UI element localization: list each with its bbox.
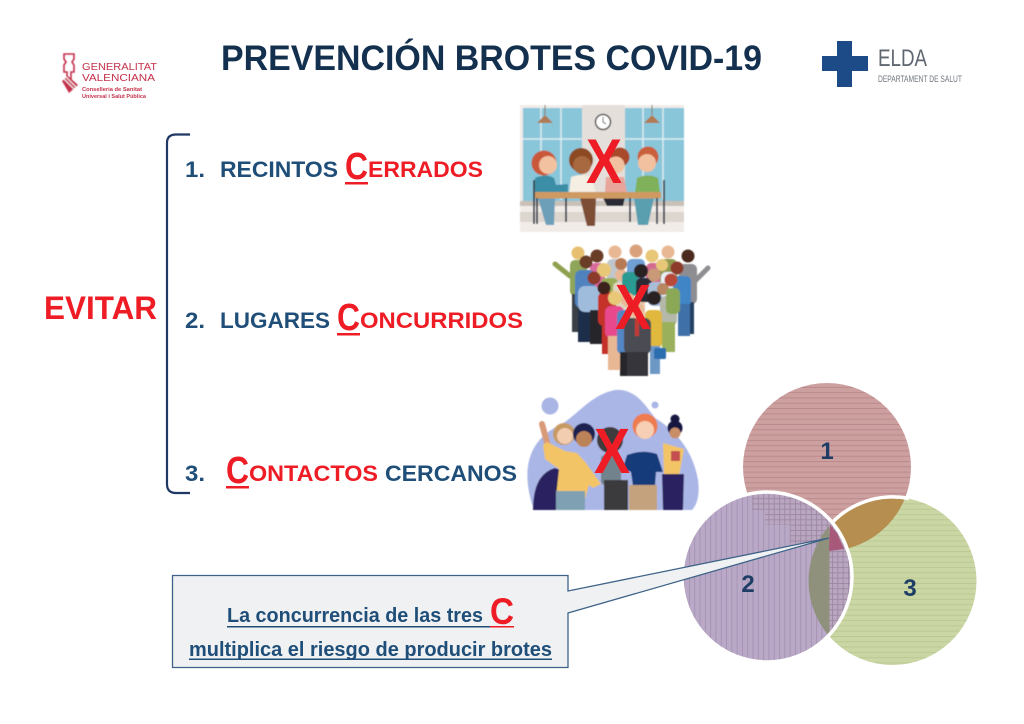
item 2: lugares concurridos: LUGARES (220, 308, 330, 333)
third row (578, 286, 600, 312)
person left (532, 150, 556, 176)
number 1: 1 (820, 438, 834, 465)
callout shape (172, 538, 829, 668)
number 2: 2 (741, 571, 755, 598)
icon: red X 1: X (586, 127, 622, 197)
circle 3 (808, 497, 976, 665)
callout text line 2: multiplica el riesgo de producir brotes (189, 639, 552, 661)
callout text line 1: La concurrencia de las tres (227, 605, 483, 627)
callout (172, 538, 829, 668)
table (535, 192, 661, 198)
bracket (167, 134, 190, 493)
image: close contacts group (527, 390, 699, 510)
big red C: C (490, 591, 514, 632)
person right (638, 146, 658, 168)
item 1: recintos cerrados: ERRADOS (368, 157, 483, 182)
item 2: lugares concurridos (185, 297, 523, 339)
item 2: lugares concurridos: C (337, 297, 360, 339)
item 2: lugares concurridos: ONCURRIDOS (360, 308, 523, 333)
logo: Generalitat Valenciana: VALENCIANA (82, 72, 155, 84)
item 1: recintos cerrados: 1. (185, 157, 205, 182)
red hair person (632, 414, 658, 438)
icon: coat of arms (62, 54, 78, 93)
raised arms (555, 264, 570, 276)
clock (596, 114, 610, 130)
item 3: contactos cercanos: 3. (185, 461, 205, 486)
item 2: lugares concurridos: 2. (185, 308, 205, 333)
item 3: contactos cercanos: CERCANOS (385, 461, 517, 486)
venn diagram (682, 383, 976, 665)
logo: Elda health department (822, 41, 962, 87)
image: crowd of people (555, 244, 708, 376)
icon: blue cross (822, 41, 868, 87)
heading: EVITAR: EVITAR (44, 290, 157, 326)
logo: Elda health department: DEPARTAMENT DE SALUT (878, 74, 962, 85)
white ring 3 (823, 497, 909, 534)
back row (570, 260, 587, 296)
overlap 1 and 2 grid (752, 495, 835, 545)
item 3: contactos cercanos (185, 450, 517, 492)
front row (605, 306, 624, 338)
left woman (533, 468, 565, 510)
logo: Generalitat Valenciana: Conselleria de Sanitat (82, 87, 142, 93)
white ring 2 top (682, 492, 852, 662)
number 3: 3 (903, 575, 917, 602)
second row (575, 270, 595, 308)
person third (610, 148, 630, 166)
overlap 2 and 3 gray (808, 526, 830, 634)
item 1: recintos cerrados (185, 146, 483, 188)
item 3: contactos cercanos: ONTACTOS (249, 461, 378, 486)
right woman (670, 414, 680, 424)
item 3: contactos cercanos: C (226, 450, 249, 492)
middle woman (597, 427, 623, 453)
person second (569, 148, 593, 172)
image: people meeting in closed room (520, 105, 684, 232)
circle 1 (743, 383, 911, 551)
icon: red X 2: X (615, 271, 651, 343)
yellow shirt man (543, 442, 601, 499)
logo: Generalitat Valenciana (62, 54, 158, 100)
logo: Generalitat Valenciana: Universal i Salut Pública (82, 94, 147, 100)
icon: red X 3: X (594, 415, 630, 487)
triple overlap (829, 525, 844, 551)
lamps (537, 115, 553, 123)
overlap 1 and 3 (834, 498, 904, 548)
logo: Elda health department: ELDA (878, 45, 927, 72)
overlap 2 and 3 grid (830, 550, 850, 632)
item 1: recintos cerrados: RECINTOS (220, 157, 338, 182)
logo: Generalitat Valenciana: GENERALITAT (82, 61, 158, 73)
title: PREVENCIÓN BROTES COVID-19 (221, 38, 762, 78)
circle 2 (682, 492, 852, 662)
item 1: recintos cerrados: C (345, 146, 368, 188)
